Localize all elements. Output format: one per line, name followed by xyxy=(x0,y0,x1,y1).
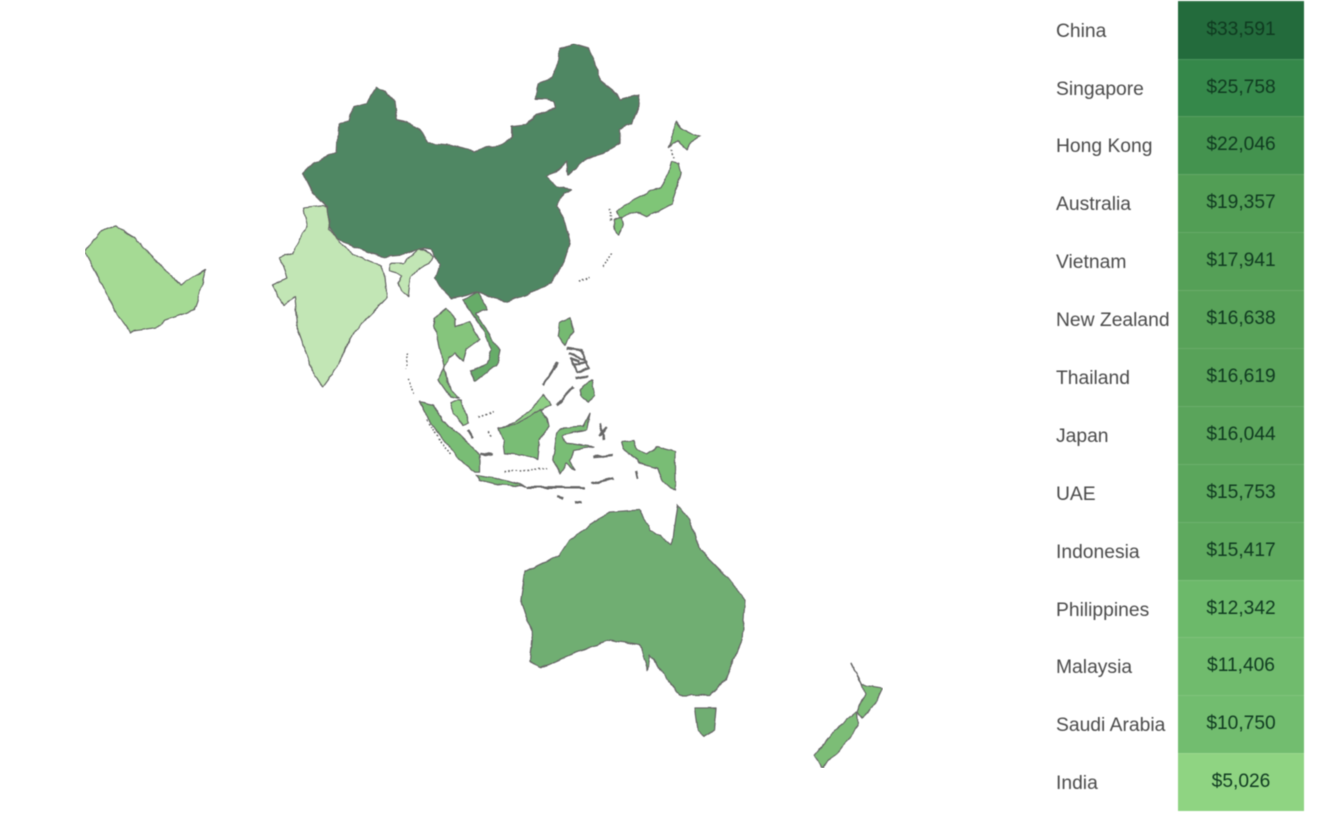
countries: Southeast Asia xyxy=(406,292,675,503)
row: Saudi Arabia xyxy=(1056,694,1305,754)
row: Hong Kong xyxy=(1056,116,1305,175)
row: Japan: Japan xyxy=(1056,426,1109,447)
row: Saudi Arabia: $10,750 xyxy=(1206,713,1276,734)
country: Vietnam xyxy=(463,292,500,382)
row: New Zealand: $16,638 xyxy=(1206,308,1276,329)
row: Indonesia xyxy=(1056,521,1305,581)
row: Philippines: $12,342 xyxy=(1206,598,1276,619)
country: Philippines xyxy=(543,318,595,405)
row: Hong Kong: $22,046 xyxy=(1206,134,1276,155)
row: Philippines: Philippines xyxy=(1056,600,1149,621)
row: India: $5,026 xyxy=(1212,771,1270,792)
row: Japan: $16,044 xyxy=(1206,424,1276,445)
country: Malaysia xyxy=(450,395,552,428)
row: Hong Kong: Hong Kong xyxy=(1056,136,1152,157)
country: Japan xyxy=(578,122,700,282)
row: Philippines xyxy=(1056,579,1305,638)
row: Singapore: $25,758 xyxy=(1206,77,1276,98)
row: UAE: UAE xyxy=(1056,484,1096,505)
country: Saudi Arabia xyxy=(85,226,205,332)
choropleth map xyxy=(85,44,883,768)
row: Vietnam: $17,941 xyxy=(1206,250,1276,271)
row: UAE: $15,753 xyxy=(1206,482,1276,503)
row: Singapore xyxy=(1056,58,1305,117)
country: China xyxy=(303,44,639,302)
row: India xyxy=(1056,752,1305,812)
row: Indonesia: $15,417 xyxy=(1206,540,1276,561)
row: Vietnam xyxy=(1056,231,1305,291)
row: Saudi Arabia: Saudi Arabia xyxy=(1056,715,1165,736)
country: Australia xyxy=(521,505,745,737)
row: India: India xyxy=(1056,773,1098,794)
row: Thailand: $16,619 xyxy=(1206,366,1276,387)
ranked country table xyxy=(1056,0,1305,812)
row: China xyxy=(1056,0,1305,60)
row: Thailand xyxy=(1056,347,1305,407)
row: Thailand: Thailand xyxy=(1056,368,1130,389)
country: Indonesia xyxy=(406,353,675,503)
row: China: $33,591 xyxy=(1206,19,1276,40)
row: China: China xyxy=(1056,21,1106,42)
country: India xyxy=(272,206,433,387)
row: Australia: Australia xyxy=(1056,194,1131,215)
row: Malaysia: $11,406 xyxy=(1207,655,1275,676)
row: Australia: $19,357 xyxy=(1206,192,1276,213)
row: New Zealand: New Zealand xyxy=(1056,310,1170,331)
country: New Zealand xyxy=(815,663,883,768)
row: New Zealand xyxy=(1056,289,1305,349)
row: Japan xyxy=(1056,405,1305,465)
row: Australia xyxy=(1056,173,1305,233)
row: UAE xyxy=(1056,463,1305,523)
row: Indonesia: Indonesia xyxy=(1056,542,1140,563)
country: Thailand xyxy=(433,308,479,398)
row: Singapore: Singapore xyxy=(1056,79,1144,100)
row: Malaysia: Malaysia xyxy=(1056,657,1132,678)
row: Vietnam: Vietnam xyxy=(1056,252,1126,273)
row: Malaysia xyxy=(1056,638,1305,696)
